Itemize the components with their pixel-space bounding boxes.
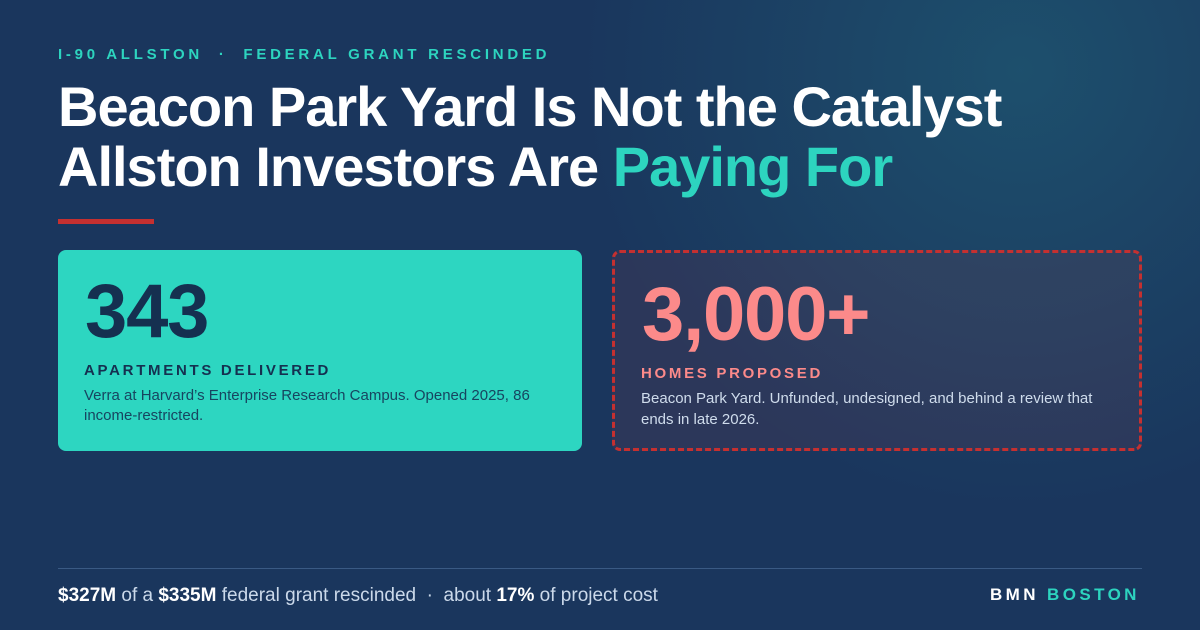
description: income-restricted. (84, 407, 203, 424)
description (84, 387, 530, 424)
eyebrow: I-90 ALLSTON · FEDERAL GRANT RESCINDED (58, 46, 550, 63)
title (58, 75, 1002, 198)
label: apartments delivered: APARTMENTS DELIVERED (84, 362, 331, 379)
description (641, 390, 1092, 428)
title: Beacon Park Yard Is Not the Catalyst (58, 75, 1001, 138)
stat: 343: 343 (85, 269, 208, 354)
red accent rule (58, 219, 154, 224)
footer divider (58, 568, 1142, 569)
stat: 3,000+: 3,000+ (642, 272, 869, 357)
label: homes proposed: HOMES PROPOSED (641, 365, 823, 382)
title: Allston Investors Are Paying For (58, 135, 892, 198)
description: Beacon Park Yard. Unfunded, undesigned, and behind a review that (641, 390, 1092, 407)
footer statistic line: $327M of a $335M federal grant rescinded · about 17% of project cost (58, 585, 658, 606)
description: Verra at Harvard’s Enterprise Research Campus. Opened 2025, 86 (84, 387, 530, 404)
panel: apartments delivered (58, 250, 582, 451)
description: ends in late 2026. (641, 411, 759, 428)
brand: BMN BOSTON (990, 585, 1140, 604)
panel: homes proposed (612, 250, 1142, 451)
